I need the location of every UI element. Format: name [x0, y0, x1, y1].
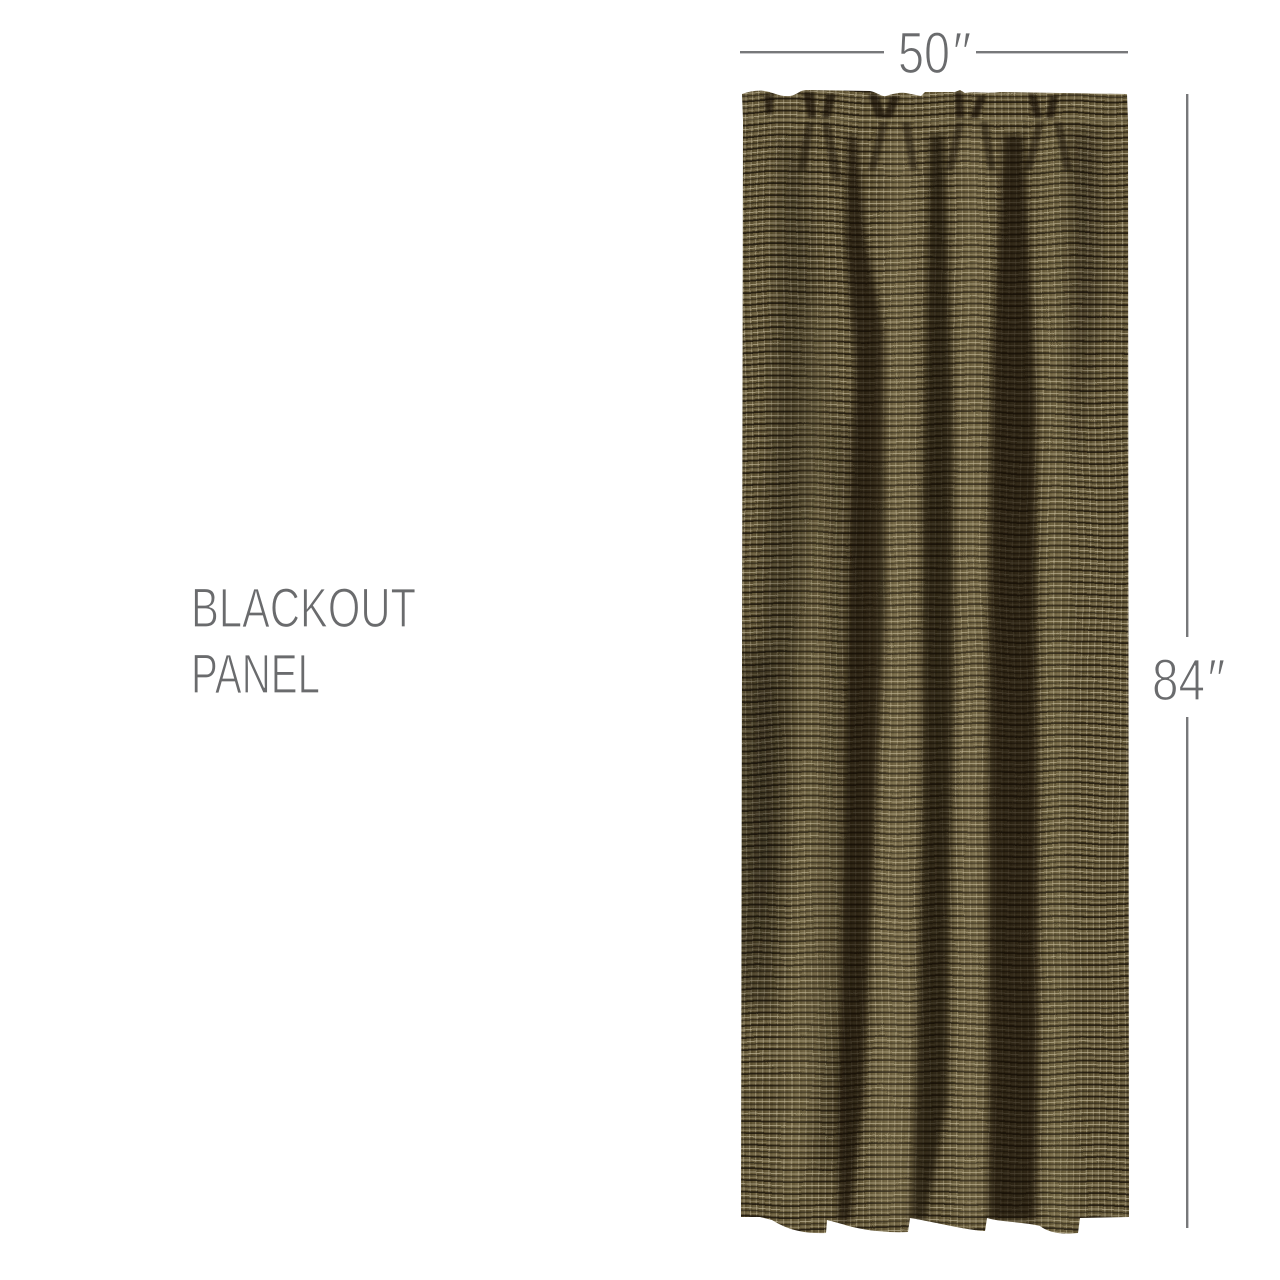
- width dimension: 50 inches: [740, 21, 1128, 86]
- soft fold shadows: [738, 130, 1098, 1170]
- curtain panel: [741, 90, 1129, 1234]
- product label: blackout panel: PANEL: [191, 642, 320, 705]
- rod pocket gathers: [742, 92, 1128, 180]
- height dimension: 84 inches: [1152, 94, 1225, 1228]
- lit fold highlights: [780, 130, 1072, 1230]
- height dimension: 84 inches: 84: [1152, 648, 1205, 713]
- deep fold shadows: [838, 135, 1038, 1222]
- width dimension: 50 inches: ″: [950, 21, 971, 86]
- product label: blackout panel: BLACKOUT: [191, 576, 416, 639]
- plaid fabric: [741, 90, 1129, 1234]
- product label: blackout panel: [191, 576, 416, 705]
- width dimension: 50 inches: 50: [898, 21, 950, 86]
- height dimension: 84 inches: ″: [1205, 648, 1225, 713]
